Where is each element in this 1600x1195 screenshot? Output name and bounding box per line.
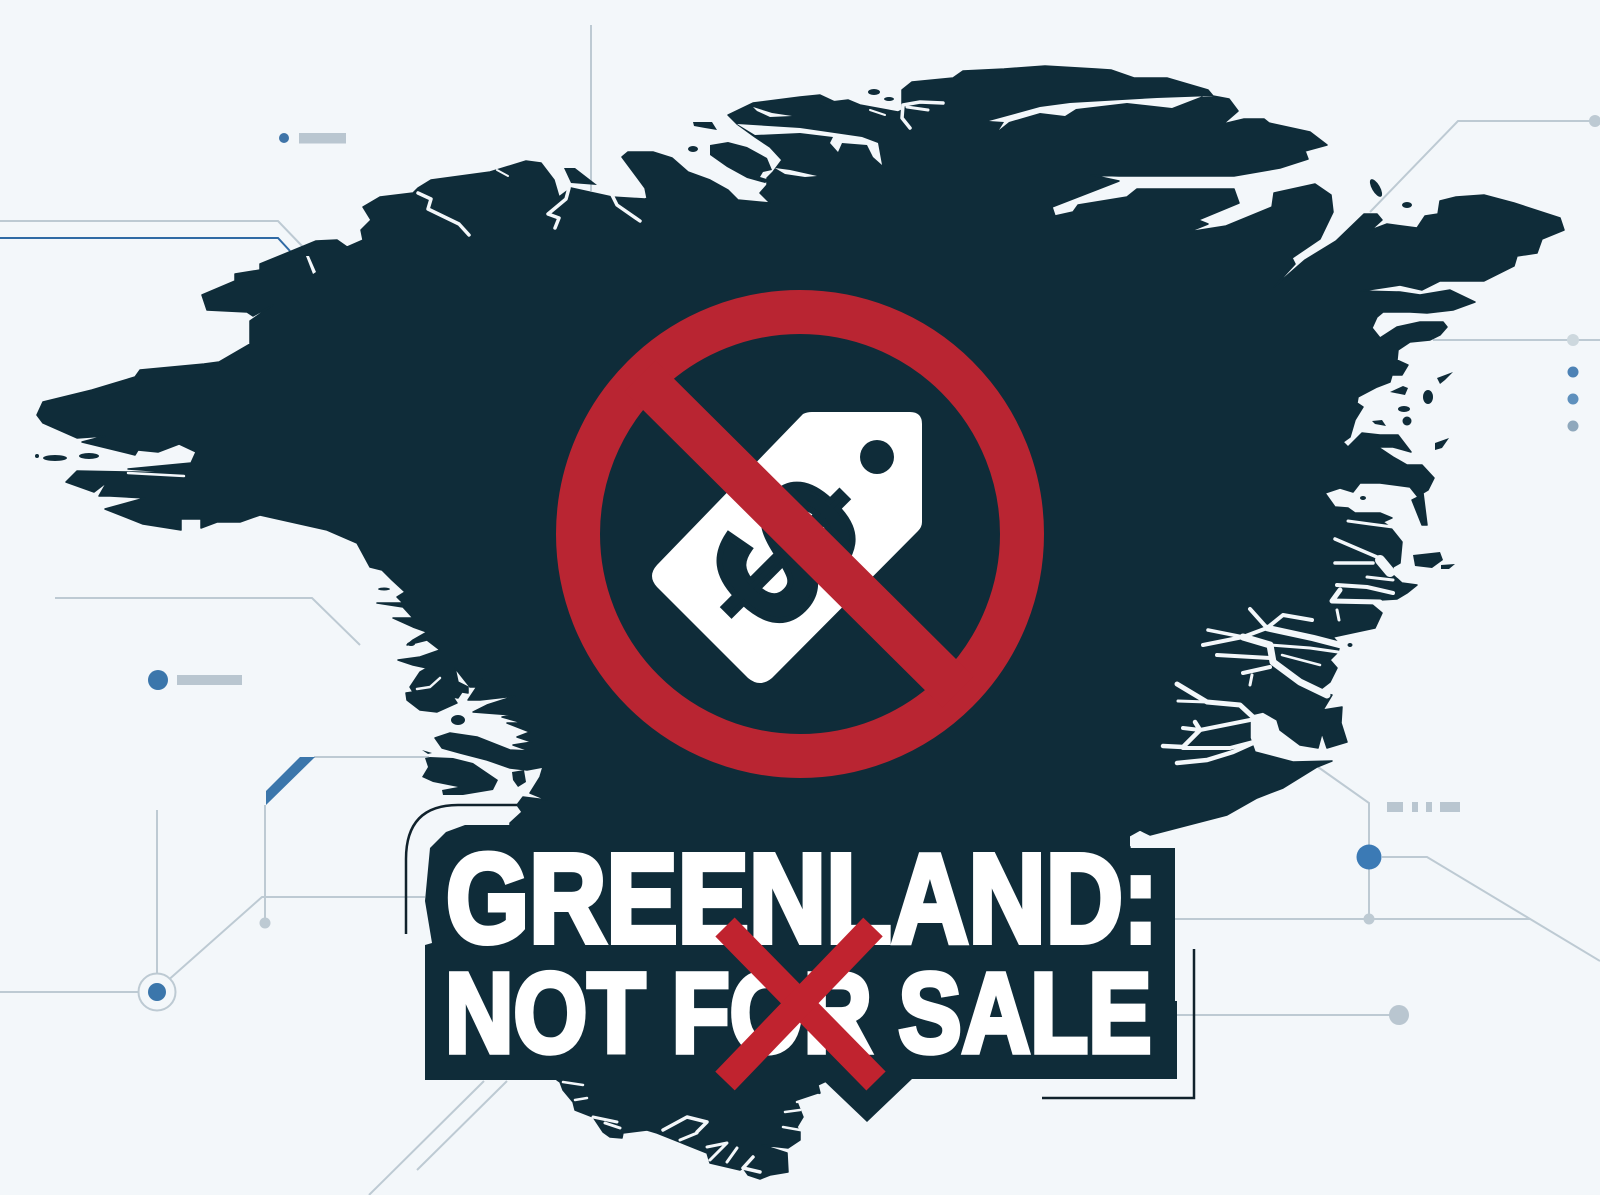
node: small grey junction right bbox=[1364, 914, 1374, 924]
title panel: dark label block bbox=[425, 825, 1177, 1122]
node: grey terminal lower right bbox=[1389, 1005, 1409, 1025]
prohibition icon: price tag in red no-sign bbox=[578, 312, 1022, 756]
red X over FOR bbox=[725, 927, 876, 1081]
icon: red prohibition ring and bar bbox=[578, 312, 1022, 756]
node: large blue right bbox=[1356, 844, 1382, 870]
map detail: offshore islands bbox=[35, 89, 1455, 795]
title bracket: top left bbox=[406, 805, 517, 934]
node: ringed blue target bbox=[138, 974, 176, 1010]
title bracket: bottom right bbox=[1042, 949, 1194, 1098]
node: left with bar bbox=[148, 670, 242, 690]
node: top left with bar bbox=[279, 133, 346, 144]
map detail: fjords cut into the land bbox=[128, 96, 1393, 1172]
title text bbox=[445, 828, 1158, 1076]
node: small grey terminal left bbox=[260, 918, 270, 928]
placeholder text bars bbox=[1387, 802, 1460, 812]
icon: dollar sign: $ bbox=[668, 433, 905, 670]
icon: tag hole bbox=[860, 440, 894, 474]
icon: price tag bbox=[652, 412, 922, 683]
nodes: right side dots bbox=[1567, 115, 1600, 432]
accent: blue slanted segment bbox=[266, 757, 315, 805]
